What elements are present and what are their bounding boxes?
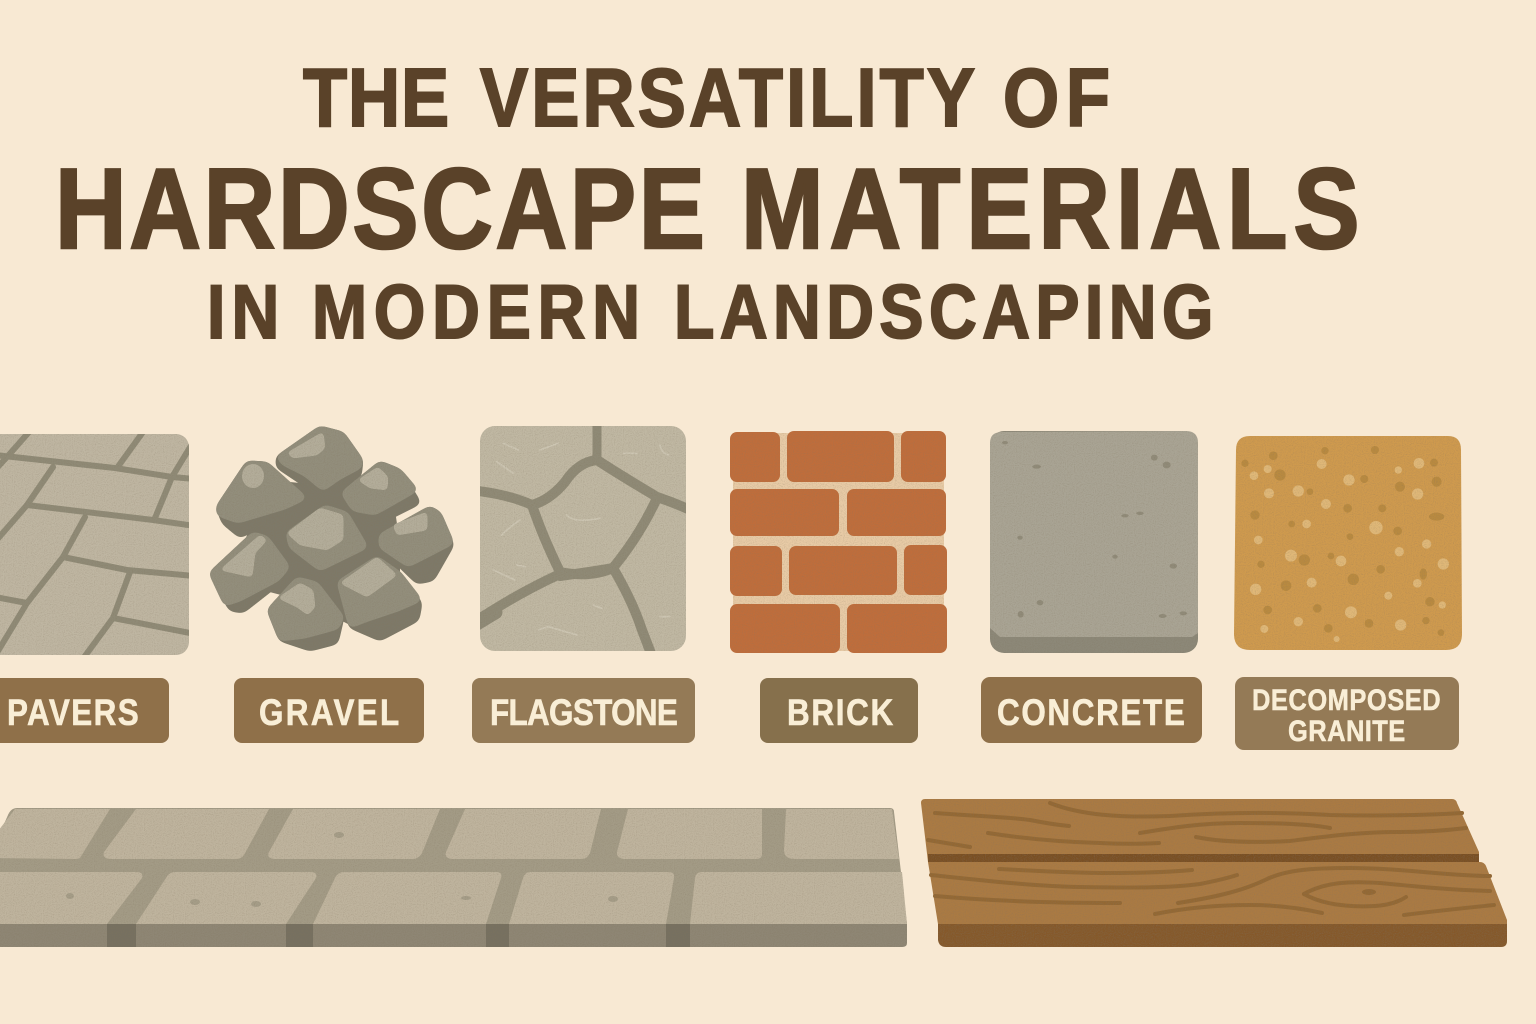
title line 1: OF — [1003, 52, 1110, 144]
panel: brick swatch — [730, 431, 947, 653]
label: concrete — [981, 677, 1202, 743]
label: brick: BRICK — [787, 693, 893, 734]
title line 2: MATERIALS — [741, 145, 1360, 273]
stone: left — [217, 462, 306, 537]
plank front edge — [938, 924, 1507, 947]
light granite flecks — [1250, 458, 1449, 642]
title line 3 — [207, 271, 1213, 355]
label: gravel: GRAVEL — [259, 693, 399, 734]
concrete specks — [1002, 441, 1187, 618]
title line 1: THE — [303, 52, 449, 144]
label: decomposed granite: GRANITE — [1288, 714, 1405, 747]
title line 2: HARDSCAPE — [55, 145, 705, 273]
label: decomposed granite: DECOMPOSED — [1252, 683, 1441, 716]
title line 2 — [55, 145, 1360, 273]
title line 1: VERSATILITY — [480, 52, 975, 144]
stone blocks, upper row — [0, 809, 899, 859]
panel: flagstone swatch — [475, 424, 690, 656]
stone: upper right — [342, 462, 420, 523]
slab front edge — [0, 924, 907, 947]
stone: right — [380, 507, 453, 583]
slab top face — [0, 808, 907, 924]
stone: bottom centre — [268, 578, 343, 650]
stone: bottom right — [338, 557, 421, 640]
title line 3: LANDSCAPING — [674, 271, 1213, 355]
slab specks — [66, 832, 618, 907]
label: pavers: PAVERS — [7, 693, 139, 734]
front edge joints — [107, 924, 690, 947]
label: decomposed granite — [1235, 677, 1459, 750]
panel: wood planks — [921, 799, 1507, 947]
stone blocks, lower row — [0, 872, 907, 924]
stone: top — [277, 427, 362, 492]
lower plank — [928, 862, 1507, 924]
title — [55, 52, 1360, 355]
label: concrete: CONCRETE — [997, 693, 1185, 734]
stone: lower left — [210, 533, 289, 612]
title line 1 — [303, 52, 1110, 144]
flagstone surface marks — [493, 443, 670, 635]
stone: centre — [287, 506, 367, 570]
label: flagstone: FLAGSTONE — [490, 693, 678, 734]
label: brick — [760, 678, 918, 743]
title line 3: MODERN — [312, 271, 640, 355]
panel: long stone paver slab — [0, 808, 907, 947]
panel: pavers swatch — [0, 432, 195, 660]
dark granite flecks — [1241, 446, 1444, 636]
label: gravel — [234, 678, 424, 743]
panel: decomposed granite swatch — [1234, 436, 1462, 650]
panel: concrete swatch — [990, 431, 1198, 653]
wood grain — [928, 803, 1494, 915]
label: pavers — [0, 678, 169, 743]
panel: gravel swatch — [210, 427, 453, 650]
label: flagstone — [472, 678, 695, 743]
title line 3: IN — [207, 271, 279, 355]
upper plank — [921, 799, 1479, 862]
